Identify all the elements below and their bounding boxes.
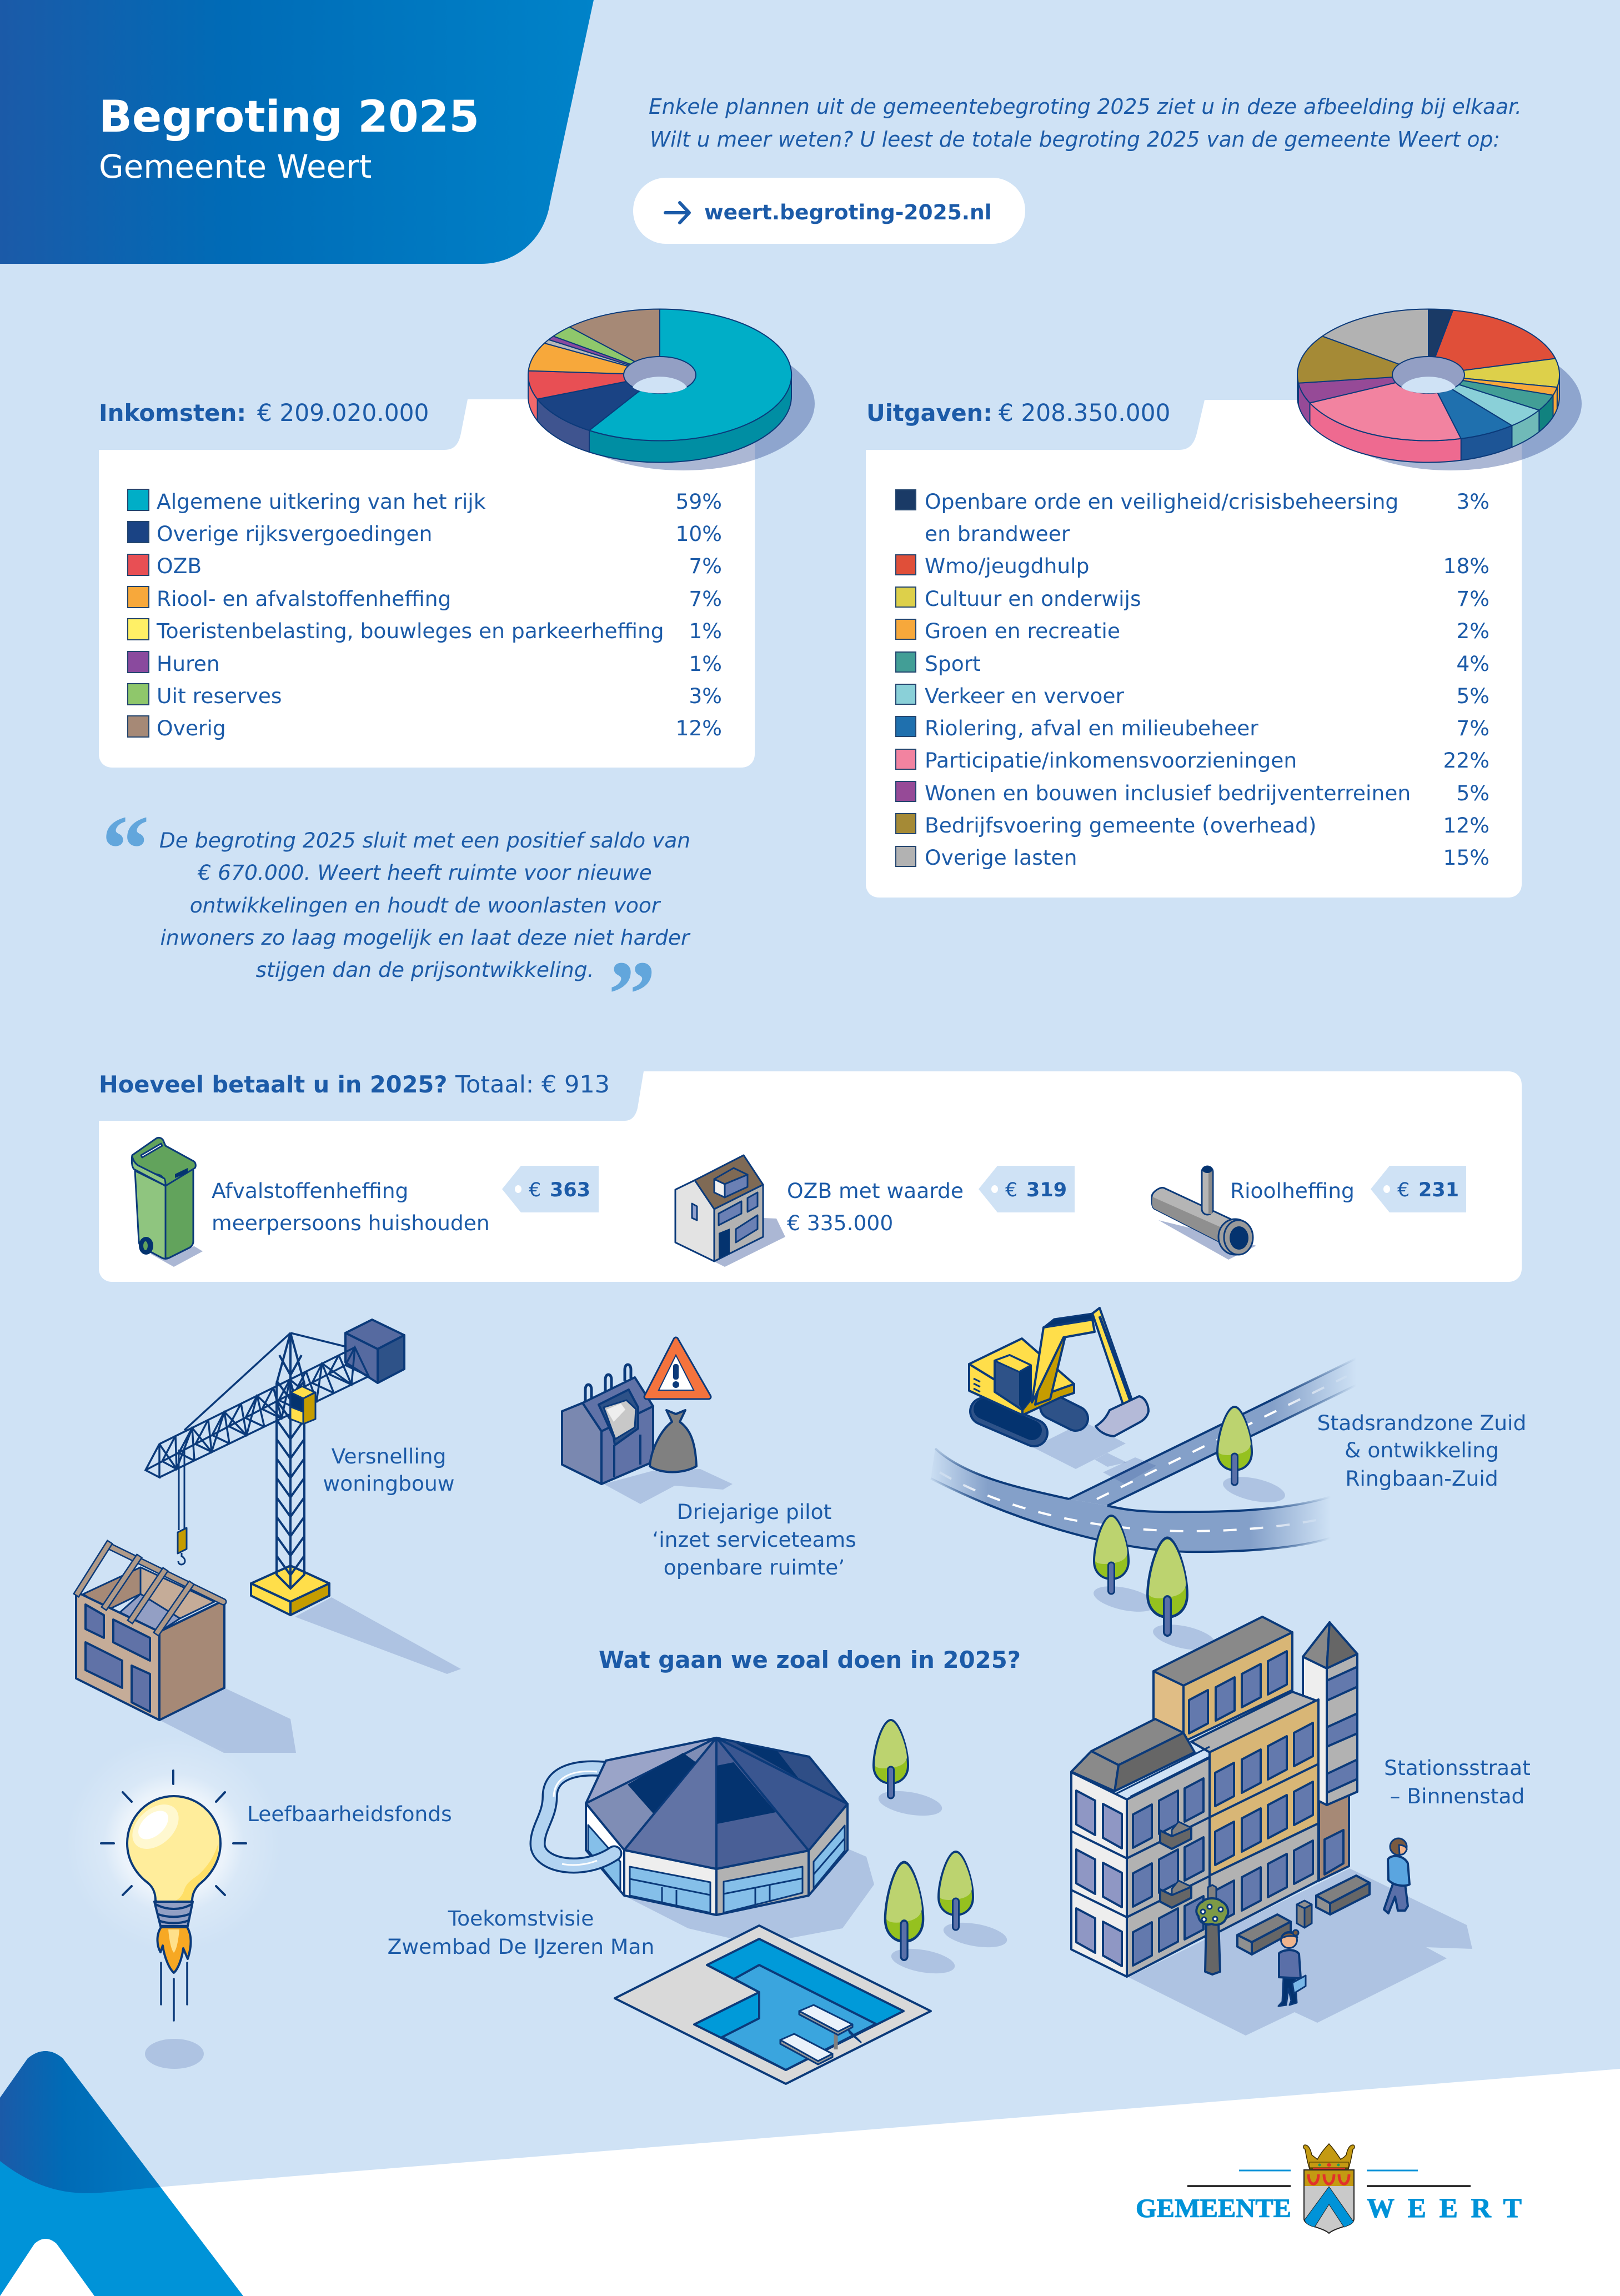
logo: gemeente weert: WEERT (1367, 2192, 1522, 2223)
illustration: road (931, 1358, 1356, 1552)
quote block (102, 796, 691, 1047)
legend: inkomsten: Uit reserves (157, 684, 282, 708)
text: driejarige pilot (652, 1500, 856, 1580)
tree: pool 1 (874, 1720, 944, 1820)
panel: inkomsten card (99, 399, 755, 768)
subtitle: Gemeente Weert (99, 148, 372, 186)
illustration: crane (146, 1320, 461, 1674)
legend: inkomsten: 12% (675, 716, 722, 740)
rays (101, 1771, 246, 1895)
bottom white area (0, 2069, 1620, 2296)
middle block (1191, 1692, 1318, 1937)
legend: uitgaven: Cultuur en onderwijs (925, 586, 1141, 611)
legend: inkomsten: 10% (675, 522, 722, 546)
tree: pool 2 (885, 1862, 957, 1978)
illustration: city buildings (1071, 1617, 1472, 2036)
text: driejarige pilot: Driejarige pilot (677, 1500, 831, 1524)
legend: uitgaven: Wonen en bouwen inclusief bedrijventerreinen (925, 781, 1411, 805)
legend: uitgaven: Verkeer en vervoer (925, 684, 1124, 708)
legend: inkomsten: Huren (157, 651, 220, 676)
crown (1303, 2144, 1355, 2170)
quote block: inwoners zo laag mogelijk en laat deze niet harder (160, 925, 691, 950)
legend: uitgaven: Bedrijfsvoering gemeente (overhead) (925, 813, 1316, 838)
upper yellow block (1153, 1617, 1292, 1742)
body (969, 1339, 1074, 1415)
flame (157, 1927, 191, 1973)
legend: uitgaven: Participatie/inkomensvoorzieningen (925, 748, 1297, 773)
legend: uitgaven (896, 489, 1489, 870)
illustration: waste container and warning (562, 1340, 733, 1504)
price tag: 363: 363 (550, 1179, 590, 1201)
crane cabin (290, 1386, 315, 1424)
text: afvalstoffenheffing (212, 1179, 490, 1235)
quote block: ” (608, 942, 656, 1047)
legend: uitgaven: Groen en recreatie (925, 619, 1120, 643)
legend: inkomsten: 59% (675, 489, 722, 514)
text: driejarige pilot: ‘inzet serviceteams (652, 1527, 856, 1552)
text: toekomstvisie: Toekomstvisie (448, 1906, 594, 1931)
text: toekomstvisie: Zwembad De IJzeren Man (388, 1934, 654, 1959)
text: stadsrandzone: Stadsrandzone Zuid (1317, 1411, 1526, 1435)
diving boards (780, 2005, 861, 2064)
speed lines (161, 1963, 187, 2021)
screw base (154, 1902, 193, 1926)
pie chart: uitgaven (1297, 309, 1582, 470)
price tag: 231 (1371, 1166, 1466, 1212)
legend: inkomsten: Toeristenbelasting, bouwleges en parkeerheffing (156, 619, 664, 643)
legend: uitgaven: 22% (1443, 748, 1489, 773)
bench 1 (1237, 1914, 1291, 1954)
water slide (538, 1768, 614, 1866)
illustration: swimming pool (615, 1926, 931, 2084)
heading: hoeveel betaalt u: Totaal: € 913 (455, 1071, 610, 1099)
icon: green bin (132, 1137, 203, 1267)
crane base (251, 1566, 329, 1615)
legend: inkomsten: 3% (689, 684, 722, 708)
shield (1304, 2170, 1354, 2233)
person: woman (1278, 1930, 1306, 2006)
legend: inkomsten: Algemene uitkering van het rijk (157, 489, 486, 514)
panel: uitgaven card (866, 400, 1522, 898)
legend: uitgaven: Openbare orde en veiligheid/crisisbeheersing (925, 489, 1398, 514)
quote block: € 670.000. Weert heeft ruimte voor nieuwe (197, 860, 652, 885)
tree: road east (1217, 1407, 1287, 1507)
price tag: 319: 319 (1026, 1179, 1067, 1201)
heading: wat gaan we doen: Wat gaan we zoal doen in 2025? (599, 1646, 1021, 1673)
pie chart: inkomsten (528, 309, 815, 470)
illustration: excavator (969, 1308, 1156, 1484)
text: versnelling woningbouw: woningbouw (323, 1471, 455, 1496)
bollard (1297, 1901, 1312, 1928)
street tree post (1196, 1885, 1228, 1974)
illustration: house under construction (76, 1545, 296, 1753)
legend: uitgaven: 5% (1456, 781, 1489, 805)
text: driejarige pilot: openbare ruimte’ (664, 1555, 845, 1580)
legend: uitgaven: 7% (1456, 716, 1489, 740)
title: Begroting 2025 (99, 91, 479, 142)
illustration: light bulb rocket (66, 1735, 282, 2069)
panel: hoeveel betaalt u card (99, 1071, 1522, 1282)
bucket (1096, 1396, 1148, 1436)
quote block: “ (102, 796, 149, 902)
heading: inkomsten: Inkomsten: (99, 399, 246, 427)
tower (1303, 1622, 1357, 1881)
text: ozb (787, 1179, 964, 1235)
crane mast (277, 1333, 304, 1588)
text: stationsstraat: – Binnenstad (1390, 1784, 1524, 1808)
quote block: ontwikkelingen en houdt de woonlasten voor (190, 893, 661, 918)
heading: uitgaven: € 208.350.000 (999, 399, 1170, 427)
tree: road south 2 (1147, 1538, 1217, 1655)
text: stationsstraat (1384, 1756, 1531, 1808)
price tag: 231: 231 (1418, 1179, 1459, 1201)
legend: uitgaven: Sport (925, 651, 981, 676)
intro text (649, 95, 1522, 152)
heading: hoeveel betaalt u: Hoeveel betaalt u in 2025? (99, 1071, 447, 1098)
legend: uitgaven: 18% (1443, 554, 1489, 578)
tracks (984, 1407, 1076, 1433)
text: rioolheffing: Rioolheffing (1230, 1179, 1355, 1203)
legend: uitgaven: 2% (1456, 619, 1489, 643)
price tag: 319 (979, 1166, 1075, 1212)
text: afvalstoffenheffing: meerpersoons huishouden (212, 1211, 490, 1235)
icon: warning triangle (646, 1340, 709, 1397)
legend: uitgaven: 15% (1443, 845, 1489, 870)
arm (1032, 1308, 1135, 1409)
icon: garbage bag (650, 1410, 696, 1472)
text: versnelling woningbouw (323, 1444, 455, 1496)
text: stadsrandzone (1317, 1411, 1526, 1491)
legend: uitgaven: 7% (1456, 586, 1489, 611)
legend: inkomsten: 1% (689, 619, 722, 643)
text: leefbaarheidsfonds: Leefbaarheidsfonds (247, 1802, 452, 1826)
legend: inkomsten: Overige rijksvergoedingen (157, 522, 432, 546)
intro text: Wilt u meer weten? U leest de totale begroting 2025 van de gemeente Weert op: (650, 128, 1500, 152)
balconies (1160, 1822, 1191, 1908)
legend: inkomsten: Riool- en afvalstoffenheffing (157, 586, 451, 611)
quote block: De begroting 2025 sluit met een positief saldo van (159, 828, 690, 853)
legend: uitgaven: 3% (1456, 489, 1489, 514)
crane hook (178, 1447, 187, 1565)
text: versnelling woningbouw: Versnelling (332, 1444, 446, 1468)
tree: pool 3 (939, 1852, 1009, 1952)
legend: uitgaven: en brandweer (925, 522, 1070, 546)
crane boom (146, 1333, 369, 1477)
icon: house (675, 1155, 785, 1267)
text: stadsrandzone: Ringbaan-Zuid (1345, 1466, 1498, 1491)
decorative mountain (0, 2051, 243, 2296)
price tag: 231: € (1397, 1179, 1410, 1201)
icon: pipe (1152, 1166, 1256, 1260)
text: ozb: € 335.000 (787, 1211, 893, 1235)
mansard roof (1071, 1719, 1195, 1791)
link button: weert.begroting-2025.nl (704, 200, 992, 224)
intro text: Enkele plannen uit de gemeentebegroting 2025 ziet u in deze afbeelding bij elkaar. (649, 95, 1522, 119)
text: ozb: OZB met waarde (787, 1179, 964, 1203)
price tag: 363 (502, 1166, 599, 1212)
bench 2 (1316, 1876, 1370, 1914)
legend: uitgaven: Riolering, afval en milieubeheer (925, 716, 1258, 740)
legend: inkomsten: OZB (157, 554, 202, 578)
bulb (124, 1796, 220, 1906)
crane counterweight (345, 1320, 404, 1383)
heading: inkomsten: € 209.020.000 (257, 399, 429, 427)
legend: uitgaven: 5% (1456, 684, 1489, 708)
person: man (1384, 1838, 1410, 1913)
text: stadsrandzone: & ontwikkeling (1345, 1438, 1499, 1462)
legend: inkomsten: 7% (689, 554, 722, 578)
walls (586, 1803, 847, 1915)
legend: uitgaven: Wmo/jeugdhulp (925, 554, 1089, 578)
header banner (0, 0, 594, 264)
legend: uitgaven: 4% (1456, 651, 1489, 676)
legend: inkomsten: 7% (689, 586, 722, 611)
legend: inkomsten (128, 489, 722, 740)
price tag: 363: € (529, 1179, 541, 1201)
icon: arrow (665, 203, 689, 223)
legend: uitgaven: 12% (1443, 813, 1489, 838)
legend: uitgaven: Overige lasten (925, 845, 1077, 870)
price tag: 319: € (1005, 1179, 1017, 1201)
legend: inkomsten: Overig (157, 716, 226, 740)
left block (1071, 1747, 1210, 1977)
text: toekomstvisie (388, 1906, 654, 1959)
tree: road south 1 (1091, 1516, 1158, 1616)
text: stationsstraat: Stationsstraat (1384, 1756, 1531, 1780)
legend: inkomsten: 1% (689, 651, 722, 676)
illustration: swimming pool building (538, 1738, 874, 1939)
link button (633, 178, 1025, 244)
heading: uitgaven: Uitgaven: (866, 399, 992, 427)
text: afvalstoffenheffing: Afvalstoffenheffing (212, 1179, 408, 1203)
quote block: stijgen dan de prijsontwikkeling. (255, 957, 594, 982)
logo: gemeente weert (1136, 2144, 1522, 2233)
roof (586, 1738, 847, 1869)
logo: gemeente weert: GEMEENTE (1136, 2194, 1291, 2223)
